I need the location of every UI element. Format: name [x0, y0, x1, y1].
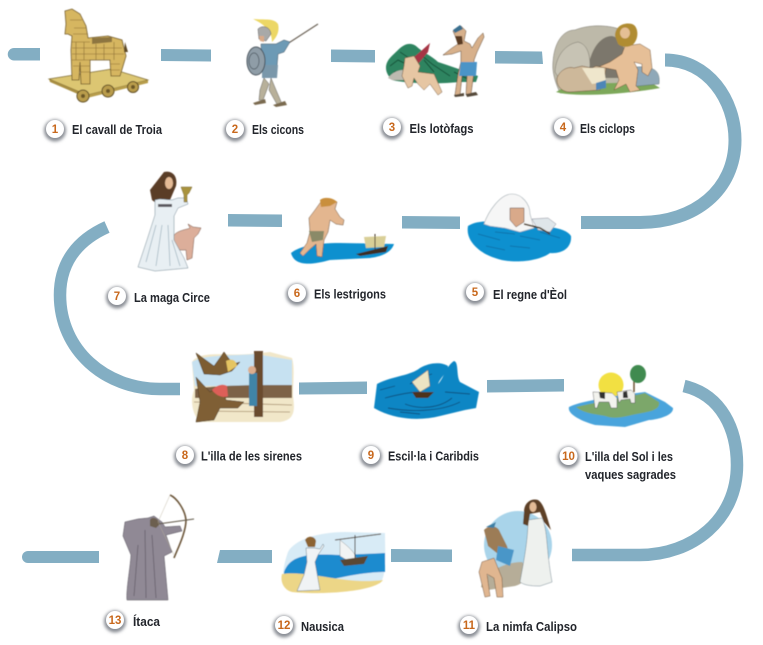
label 1: [44, 120, 163, 142]
label 12: [273, 616, 345, 638]
icon: cave of the cyclops: [553, 24, 660, 95]
icon: ship in storm with sirens: [192, 351, 294, 422]
label 10: vaques sagrades: [585, 468, 676, 482]
icon: Nausicaa on the beach: [281, 532, 385, 593]
label 6: Els lestrigons: [314, 288, 386, 302]
label 9: Escil·la i Caribdis: [388, 450, 479, 464]
label 13: Ítaca: [133, 614, 161, 629]
label 9: 9: [368, 450, 374, 462]
label 3: [381, 118, 474, 140]
label 4: [552, 118, 635, 140]
label 3: 3: [389, 122, 395, 134]
label 1: 1: [52, 124, 59, 136]
label 5: [464, 282, 567, 304]
label 3: Els lotòfags: [410, 122, 474, 136]
label 1: El cavall de Troia: [72, 123, 163, 137]
label 7: [106, 286, 210, 308]
label 13: [104, 610, 161, 632]
icon: lotus eaters: [386, 25, 484, 97]
label 2: 2: [232, 124, 238, 136]
label 2: Els cicons: [252, 123, 304, 137]
label 5: 5: [472, 287, 479, 299]
label 9: [360, 446, 479, 468]
route: blue dashed path: [8, 48, 737, 563]
icon: whirlpool and ship: [374, 361, 479, 419]
label 12: 12: [278, 620, 290, 632]
label 11: 11: [463, 620, 476, 632]
label 10: [558, 446, 676, 482]
icon: hooded archer at Ithaca: [123, 495, 194, 600]
label 11: La nimfa Calipso: [486, 620, 577, 634]
label 6: [286, 284, 386, 306]
label 8: 8: [182, 450, 189, 462]
label 5: El regne d'Èol: [493, 287, 567, 302]
label 7: 7: [114, 291, 120, 303]
label 12: Nausica: [301, 620, 345, 634]
label 4: 4: [560, 122, 567, 134]
label 2: [224, 120, 304, 142]
label 8: [174, 446, 302, 468]
icon: Trojan horse: [49, 9, 148, 102]
label 7: La maga Circe: [134, 291, 210, 305]
label 8: L'illa de les sirenes: [201, 450, 302, 464]
icon: man running at the Laestrygonians shore: [291, 198, 394, 264]
label 11: [458, 616, 577, 638]
label 6: 6: [294, 288, 300, 300]
label 10: L'illa del Sol i les: [585, 450, 673, 464]
label 13: 13: [109, 615, 121, 627]
icon: Circe with goblet and pig: [138, 172, 201, 271]
icon: Odysseus and nymph Calypso: [479, 500, 552, 597]
icon: soldier with spear: [247, 19, 318, 107]
icon: king of the winds Aeolus: [468, 194, 571, 261]
label 10: 10: [562, 451, 575, 463]
label 4: Els ciclops: [580, 122, 635, 136]
icon: island of the sun with cows: [569, 365, 673, 427]
